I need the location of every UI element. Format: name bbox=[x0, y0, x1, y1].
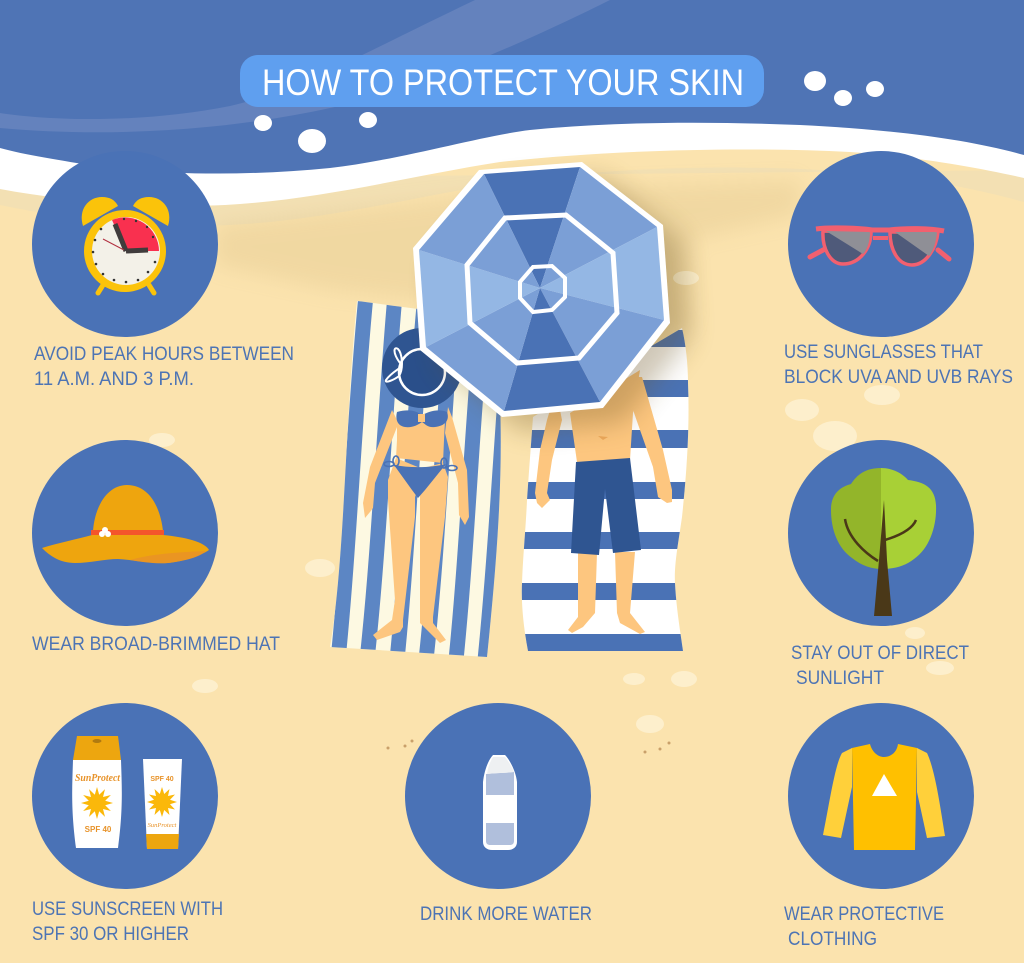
label: sunglasses: USE SUNGLASSES THAT bbox=[784, 341, 983, 363]
icon: sunscreen bottle: SunProtect bbox=[75, 773, 121, 784]
icon: sunscreen tube bbox=[143, 759, 182, 849]
icon: sunscreen tube: SPF 40 bbox=[150, 776, 174, 783]
icon: sunglasses bbox=[810, 228, 949, 265]
icon: sunscreen bottle: SPF 40 bbox=[85, 825, 112, 834]
label: stay in shade: SUNLIGHT bbox=[796, 667, 884, 689]
sand speckles bbox=[149, 271, 954, 754]
man sunbathing bbox=[535, 370, 672, 634]
label: protective clothing: WEAR PROTECTIVE bbox=[784, 903, 944, 925]
label: wear hat: WEAR BROAD-BRIMMED HAT bbox=[32, 633, 280, 655]
panel: stay in shade bbox=[788, 440, 974, 626]
label: drink water: DRINK MORE WATER bbox=[420, 903, 592, 925]
umbrella panels bbox=[419, 167, 664, 411]
woman hat bbox=[382, 328, 462, 408]
man skin bbox=[535, 370, 672, 634]
icon: tree bbox=[831, 468, 936, 616]
bikini bottom bbox=[394, 464, 446, 498]
panel: sunglasses bbox=[788, 151, 974, 337]
label: sunscreen: USE SUNSCREEN WITH bbox=[32, 898, 223, 920]
icon: sunscreen bottle bbox=[72, 736, 122, 848]
panel: drink water bbox=[405, 703, 591, 889]
soft shade on sand bbox=[215, 180, 800, 330]
panel: avoid peak hours bbox=[32, 151, 218, 337]
woman skin bbox=[363, 407, 469, 643]
umbrella shadow bbox=[433, 177, 690, 432]
panel: protective clothing bbox=[788, 703, 974, 889]
woman sunbathing bbox=[363, 328, 469, 643]
bikini ties bbox=[384, 456, 457, 470]
label: avoid peak hours bbox=[34, 343, 294, 390]
sea bbox=[0, 0, 1024, 174]
shaded wet sand band bbox=[0, 167, 1024, 226]
right towel bbox=[522, 328, 688, 651]
label: protective clothing: CLOTHING bbox=[788, 928, 877, 950]
white surf bbox=[0, 100, 1024, 206]
label: avoid peak hours: AVOID PEAK HOURS BETWEEN bbox=[34, 343, 294, 365]
umbrella centre ring bbox=[520, 266, 565, 312]
icon: water bottle bbox=[483, 755, 517, 850]
icon: alarm clock bbox=[82, 197, 169, 293]
icon: long-sleeve shirt bbox=[823, 744, 945, 850]
icon: sunscreen tube: SunProtect bbox=[148, 822, 177, 829]
man shorts bbox=[571, 458, 641, 555]
title pill: HOW TO PROTECT YOUR SKIN bbox=[262, 62, 744, 103]
foam dots bbox=[254, 71, 884, 153]
sea light swoosh bbox=[0, 0, 610, 132]
label: stay in shade bbox=[791, 642, 969, 689]
panel: sunscreen bbox=[32, 703, 218, 889]
panel: wear hat bbox=[32, 440, 218, 626]
label: avoid peak hours: 11 A.M. AND 3 P.M. bbox=[34, 368, 194, 390]
beach umbrella bbox=[413, 162, 670, 417]
icon: broad-brimmed hat bbox=[42, 485, 209, 563]
label: sunscreen bbox=[32, 898, 223, 945]
bikini top bbox=[396, 410, 448, 427]
label: sunscreen: SPF 30 OR HIGHER bbox=[32, 923, 189, 945]
label: sunglasses bbox=[784, 341, 1013, 388]
umbrella inner ring bbox=[467, 215, 617, 363]
left towel bbox=[330, 301, 501, 657]
label: stay in shade: STAY OUT OF DIRECT bbox=[791, 642, 969, 664]
label: protective clothing bbox=[784, 903, 944, 950]
